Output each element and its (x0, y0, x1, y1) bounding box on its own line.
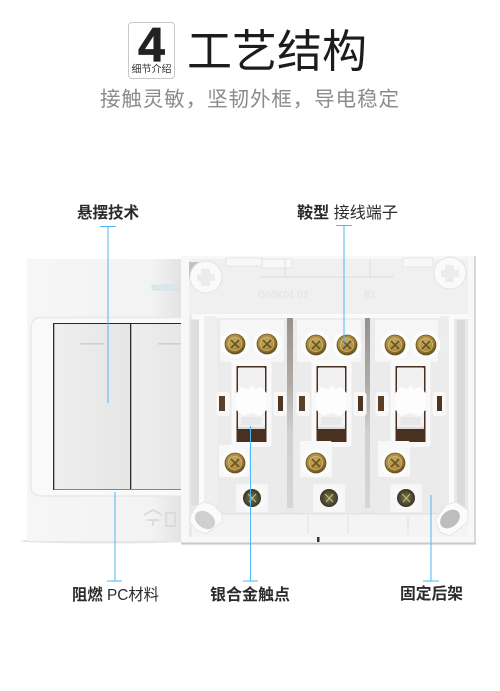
mounting ear bottom right (435, 502, 468, 536)
subtitle: 接触灵敏，坚韧外框，导电稳定 (100, 88, 399, 111)
badge caption: 细节介绍 (132, 62, 172, 76)
switch module 2 (293, 318, 366, 513)
lower frame strip (192, 514, 468, 537)
title: 工艺结构 (187, 26, 367, 77)
rear frame of switch (181, 256, 476, 545)
callout: 阻燃PC材料 (72, 492, 159, 604)
callout: 悬摆技术: 悬摆技术 (77, 203, 139, 222)
badge number: 4 (138, 20, 165, 72)
side rails (191, 320, 199, 505)
callout: 悬摆技术 (77, 203, 139, 403)
switch module 3 (370, 318, 446, 513)
callout: 固定后架 (400, 495, 463, 603)
left rocker (54, 324, 130, 489)
mounting ear bottom left (190, 502, 222, 534)
rear frame of switch: B1 (364, 290, 377, 301)
right rocker (131, 324, 183, 489)
callout: 银合金触点 (210, 426, 290, 604)
mounting ear top right (434, 257, 466, 289)
mounting ear top left (189, 261, 222, 293)
callout: 鞍型接线端子: 鞍型 接线端子 (297, 203, 398, 222)
module gaps (287, 318, 293, 508)
callout: 固定后架: 固定后架 (400, 584, 463, 603)
callout: 阻燃PC材料: 阻燃 PC材料 (72, 585, 159, 604)
switch module 1 (216, 318, 287, 513)
brand mark (144, 510, 175, 526)
rear frame of switch: G03K01 02 (258, 290, 309, 301)
indicator light (152, 285, 182, 290)
section badge (128, 20, 174, 78)
upper frame strip (189, 259, 468, 316)
rocker recess (31, 318, 183, 496)
front panel of switch (20, 259, 190, 544)
callout: 银合金触点: 银合金触点 (210, 585, 290, 604)
callout: 鞍型接线端子 (297, 203, 398, 345)
